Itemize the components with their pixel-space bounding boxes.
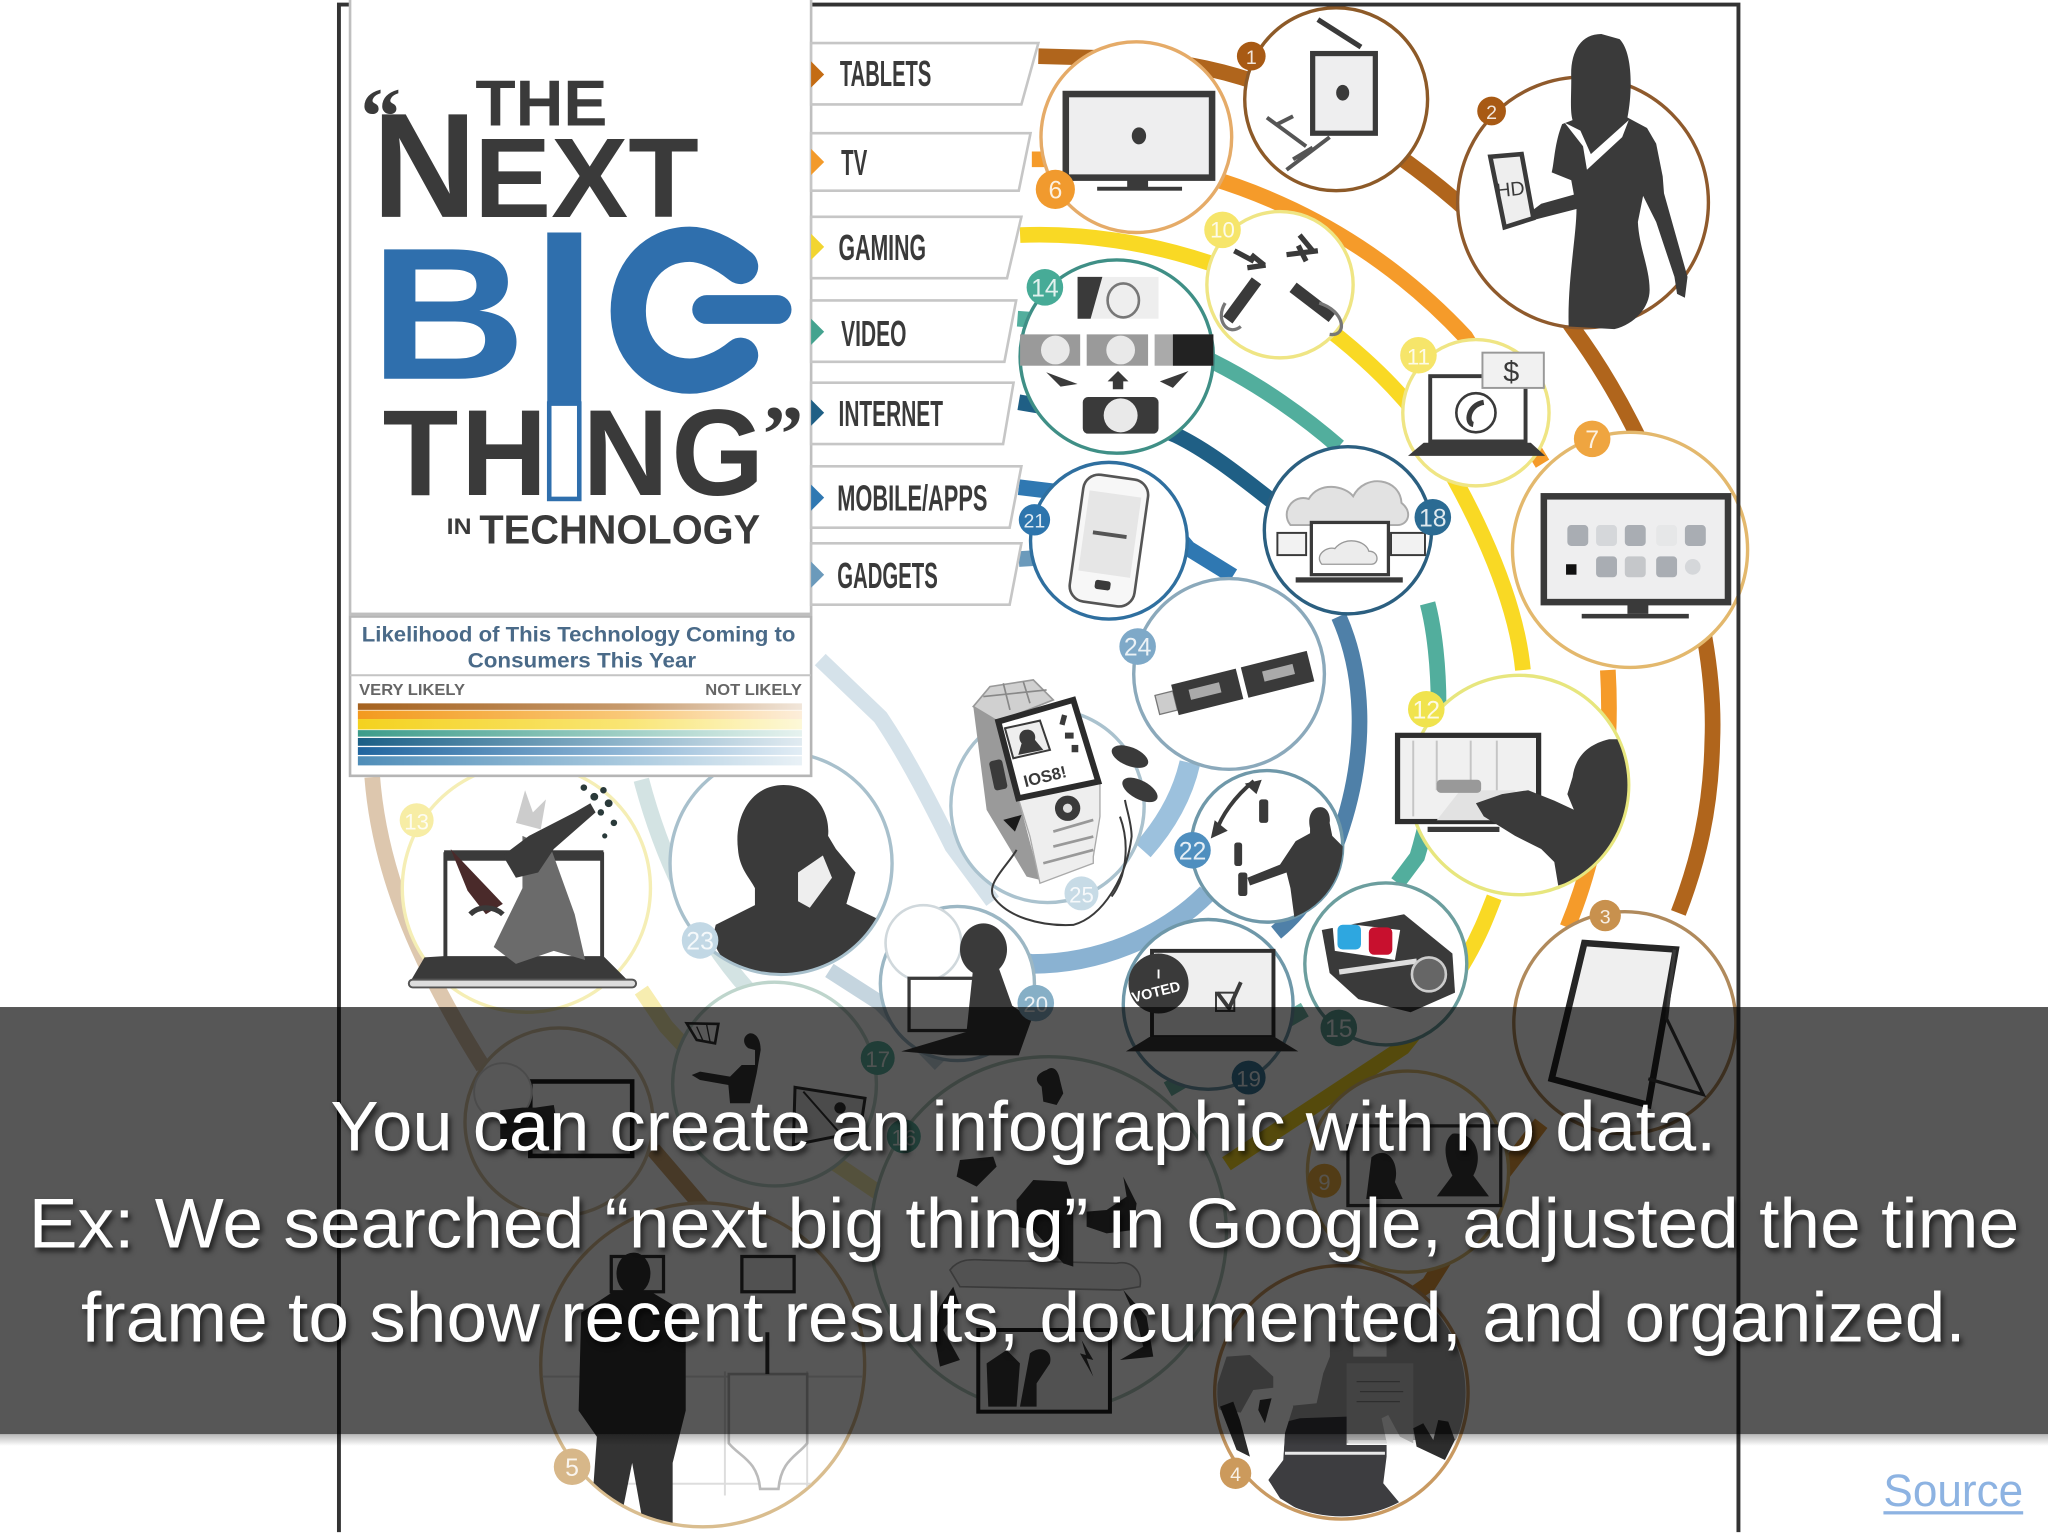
source link: Source (1883, 1465, 2023, 1516)
circle 13: character leaping out of laptop (400, 764, 650, 1012)
title quote open: “ (360, 72, 401, 162)
circle 22: motion gaming player: 22 (1179, 838, 1206, 865)
circle 10: mobile gaming hands: 10 (1210, 218, 1235, 243)
circle 19: online voting laptop: VOTED (1130, 979, 1182, 1006)
caption text: frame to show recent results, documented, and organized. (81, 1277, 1966, 1356)
title word THING: T (383, 385, 458, 522)
tab: video: VIDEO (841, 313, 906, 354)
circle 21: smartphone: 21 (1024, 511, 1045, 533)
circle 4: person reading a document: 4 (1230, 1464, 1241, 1486)
circle 5: man in bathroom (541, 1203, 865, 1528)
caption text: You can create an infographic with no data. (330, 1087, 1716, 1166)
circle 25: smart watch with earbuds (951, 680, 1161, 925)
legend heading: Consumers This Year (468, 647, 697, 672)
panel: likelihood legend (350, 616, 811, 776)
tab: tv (811, 133, 1031, 191)
tab: internet: INTERNET (839, 393, 943, 434)
title quote close: ” (763, 389, 803, 479)
title word THING: H (461, 385, 547, 522)
caption text (29, 1087, 2019, 1356)
circle 21: smartphone (1019, 462, 1187, 619)
circle 8: laptop with speech bubble (465, 1028, 653, 1216)
circle 7: smart TV with apps: 7 (1585, 427, 1599, 454)
tab: mobile apps (811, 466, 1021, 528)
circle 19: online voting laptop: 19 (1236, 1067, 1261, 1092)
circle 4: person reading a document (1213, 1266, 1472, 1519)
circle 24: USB sticks: 24 (1124, 635, 1152, 662)
caption text: Ex: We searched “next big thing” in Google, adjusted the time (29, 1183, 2019, 1262)
tab: tablets (811, 43, 1038, 104)
circle 17: basketball on screens: 17 (865, 1047, 890, 1072)
legend heading: Likelihood of This Technology Coming to (362, 621, 795, 646)
circle 9: video chat heads (1307, 1071, 1509, 1272)
circle 12: gesture control TV (1398, 675, 1639, 895)
legend scale labels (359, 682, 803, 699)
legend scale labels: VERY LIKELY (359, 682, 466, 699)
circle 14: image editing frames: 14 (1031, 275, 1059, 302)
circle 15: 3D projector with glasses (1305, 883, 1467, 1046)
circle 14: image editing frames (1020, 260, 1213, 453)
tab: gadgets (811, 543, 1021, 605)
panel: title (350, 0, 811, 614)
circle 19: online voting laptop (1123, 920, 1298, 1095)
circle 9: video chat heads: 9 (1318, 1170, 1331, 1195)
subtitle IN TECHNOLOGY: IN (447, 514, 472, 539)
circle 20: person with laptop and speech bubble: 20 (1023, 992, 1048, 1017)
circle 19: online voting laptop: I (1157, 966, 1160, 981)
circle 23: person on phone: 23 (686, 929, 714, 956)
legend gradient bars (358, 703, 802, 765)
circle 11: laptop video calling: 11 (1407, 344, 1430, 369)
circle 6: Apple TV (1036, 42, 1232, 232)
tab: gaming: GAMING (839, 227, 926, 268)
title word NEXT (372, 82, 699, 249)
legend heading (362, 621, 795, 672)
title word THING: N (583, 385, 669, 522)
circle 25: smart watch with earbuds: IOS8! (1022, 762, 1068, 791)
circle 3: tablet on stand (1514, 900, 1736, 1134)
circle 3: tablet on stand: 3 (1600, 906, 1611, 928)
circle 24: USB sticks (1119, 579, 1324, 769)
circle 16: social video and couples: 16 (891, 1125, 916, 1150)
tab: tv: TV (841, 142, 868, 183)
title word NEXT: EXT (474, 115, 699, 242)
dark caption band (0, 1007, 2048, 1446)
title word NEXT: N (372, 82, 477, 249)
circle 15: 3D projector with glasses: 15 (1325, 1016, 1353, 1043)
circle 2: woman with HD tablet: 2 (1486, 102, 1497, 124)
circle 1: iPad: 1 (1246, 47, 1257, 69)
circle 12: gesture control TV: 12 (1412, 697, 1440, 724)
circle 20: person with laptop and speech bubble (880, 905, 1054, 1061)
category tabs (811, 43, 1038, 605)
circle 16: social video and couples (871, 1057, 1226, 1412)
title word THE: THE (475, 66, 607, 139)
circle 6: Apple TV: 6 (1048, 178, 1062, 205)
circle 7: smart TV with apps (1512, 421, 1748, 667)
outer frame (339, 5, 1738, 1532)
tab: mobile apps: MOBILE/APPS (837, 478, 987, 519)
circle 11: laptop video calling: $ (1503, 356, 1519, 388)
circle 23: person on phone (670, 752, 892, 980)
tab: tablets: TABLETS (840, 53, 931, 94)
circle 5: man in bathroom: 5 (565, 1455, 579, 1482)
circle 22: motion gaming player (1174, 771, 1345, 927)
circle 17: basketball on screens (673, 982, 895, 1186)
title word THING: G (671, 385, 764, 522)
subtitle IN TECHNOLOGY: TECHNOLOGY (479, 506, 760, 552)
circle 25: smart watch with earbuds: 25 (1069, 883, 1094, 908)
title word THING (383, 385, 764, 522)
tab: internet (811, 383, 1014, 444)
title word BIG: B (370, 209, 526, 419)
title word BIG (370, 209, 792, 499)
tab: gadgets: GADGETS (837, 555, 938, 596)
circle 2: woman with HD tablet: HD (1495, 178, 1526, 202)
legend scale labels: NOT LIKELY (705, 682, 803, 699)
tab: video (811, 300, 1016, 362)
circle 13: character leaping out of laptop: 13 (404, 809, 429, 834)
circle 1: iPad (1237, 8, 1428, 191)
circle 11: laptop video calling (1400, 337, 1549, 486)
circle 18: cloud computing: 18 (1419, 505, 1447, 532)
circle 10: mobile gaming hands (1204, 212, 1353, 358)
circle 18: cloud computing (1264, 447, 1451, 614)
coloured connector rings (372, 56, 1713, 1403)
tab: gaming (811, 217, 1021, 278)
circle 2: woman with HD tablet (1458, 34, 1708, 329)
